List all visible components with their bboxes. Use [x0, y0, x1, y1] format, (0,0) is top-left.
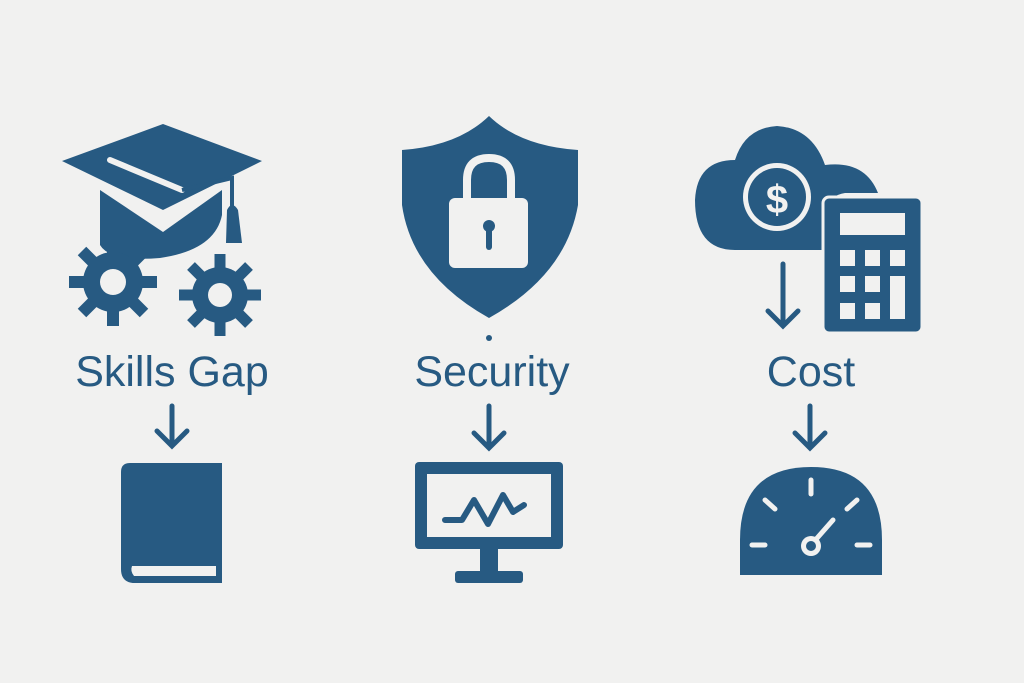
icon: shield with lock — [402, 116, 578, 341]
icon: cloud with dollar and calculator — [695, 126, 922, 333]
arrow: skills gap — [157, 406, 187, 446]
icon: book — [121, 463, 222, 583]
arrow: security — [474, 406, 504, 448]
icon: gauge — [740, 467, 882, 575]
icon: cloud with dollar and calculator: $ — [766, 178, 788, 222]
arrow: cost — [795, 406, 825, 448]
icon: monitor with chart — [415, 462, 563, 583]
icon: gears — [69, 238, 261, 336]
heading: Skills Gap: Skills Gap — [75, 348, 269, 396]
icon: graduation cap — [62, 124, 262, 259]
heading: Cost: Cost — [767, 348, 855, 396]
column: skills gap — [62, 124, 262, 336]
heading: Security: Security — [414, 348, 570, 396]
